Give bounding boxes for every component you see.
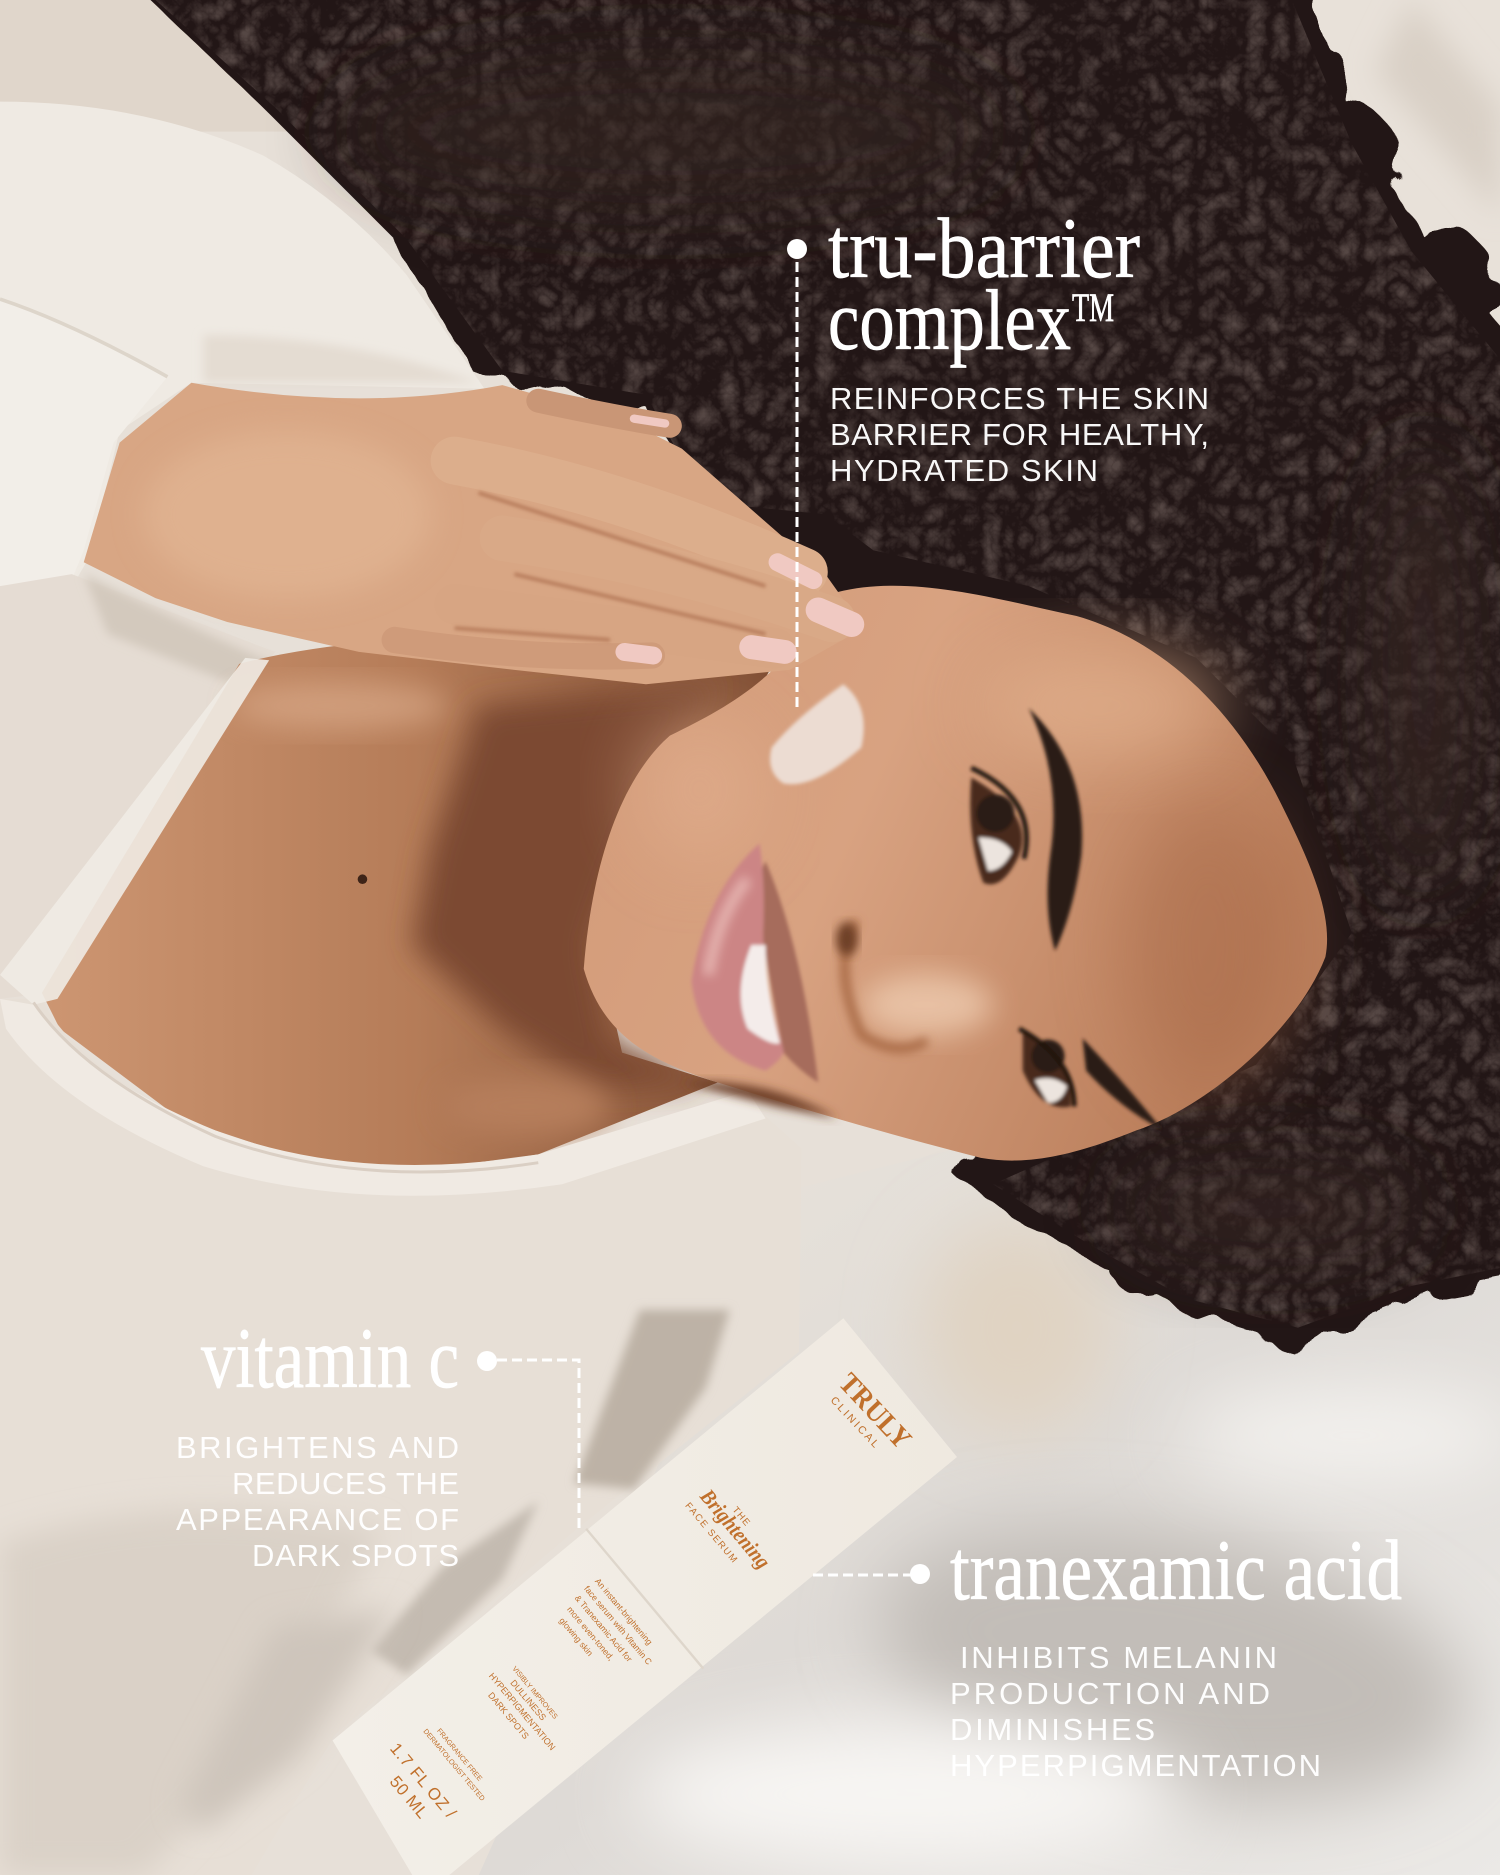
heading: TM bbox=[1072, 285, 1114, 330]
eye upper bbox=[970, 768, 1026, 884]
box label: brand: CLINICAL bbox=[828, 1395, 883, 1452]
pointer dot and dashed line bbox=[477, 1351, 579, 1530]
box label: claims: DULLINESS bbox=[508, 1678, 548, 1722]
description: BRIGHTENS AND bbox=[176, 1430, 459, 1465]
heading: tranexamic acid bbox=[950, 1522, 1402, 1618]
box label: description: glowing skin bbox=[557, 1616, 595, 1658]
nails bbox=[624, 419, 852, 656]
nose bbox=[836, 921, 927, 1048]
callout: vitamin c bbox=[176, 1310, 579, 1573]
neck and chest skin bbox=[42, 631, 789, 1178]
box label: claims: VISIBLY IMPROVES bbox=[510, 1665, 559, 1721]
description: DIMINISHES bbox=[950, 1712, 1155, 1747]
description: INHIBITS MELANIN bbox=[960, 1640, 1277, 1675]
description: REDUCES THE bbox=[232, 1466, 459, 1501]
box label: size: DERMATOLOGIST TESTED bbox=[421, 1728, 486, 1803]
box label: size: FRAGRANCE FREE bbox=[435, 1727, 484, 1783]
box label: product name: FACE SERUM bbox=[682, 1501, 740, 1566]
box label: claims bbox=[477, 1658, 573, 1761]
heading: complex bbox=[828, 272, 1071, 368]
box label: claims: HYPERPIGMENTATION bbox=[487, 1671, 557, 1752]
heading: tru-barrier bbox=[828, 200, 1140, 296]
face bbox=[584, 586, 1327, 1161]
box label: description: An instant-brightening bbox=[593, 1576, 655, 1647]
description: BARRIER FOR HEALTHY, bbox=[830, 417, 1209, 452]
callout: tru-barrier complex bbox=[787, 200, 1209, 712]
lower shirt bbox=[0, 658, 801, 1875]
eye lower bbox=[1019, 1029, 1074, 1107]
upper chest shirt bbox=[0, 574, 287, 999]
description bbox=[950, 1640, 1321, 1783]
callout: tranexamic acid bbox=[813, 1522, 1402, 1783]
description: PRODUCTION AND bbox=[950, 1676, 1270, 1711]
heading bbox=[828, 200, 1140, 368]
description: HYDRATED SKIN bbox=[830, 453, 1098, 488]
sleeve raised arm bbox=[0, 102, 484, 604]
product box bbox=[333, 1318, 957, 1875]
box label: description bbox=[552, 1575, 664, 1692]
box label: claims: DARK SPOTS bbox=[486, 1690, 531, 1741]
serum dollop bbox=[770, 684, 864, 784]
description: REINFORCES THE SKIN bbox=[830, 381, 1209, 416]
pointer dot and dashed line bbox=[787, 239, 807, 712]
description bbox=[176, 1430, 459, 1573]
box label: product name: Brightening bbox=[695, 1484, 775, 1573]
box label: description: & Tranexamic Acid for bbox=[573, 1593, 634, 1664]
description bbox=[830, 381, 1209, 488]
hand bbox=[84, 383, 864, 684]
box label: description: more even-toned, bbox=[565, 1604, 616, 1662]
eyebrow upper bbox=[1029, 708, 1082, 951]
box label: size: 1.7 FL OZ / bbox=[386, 1739, 461, 1823]
lips bbox=[691, 843, 818, 1083]
eyebrow lower bbox=[1083, 1038, 1163, 1130]
description: HYPERPIGMENTATION bbox=[950, 1748, 1321, 1783]
box label: description: face serum with Vitamin C bbox=[582, 1584, 654, 1667]
box label: product name: THE bbox=[730, 1505, 753, 1529]
box label: size: 50 ML bbox=[386, 1772, 433, 1823]
pointer dot and dashed line bbox=[813, 1564, 930, 1584]
description: DARK SPOTS bbox=[252, 1538, 459, 1573]
box label: size bbox=[370, 1714, 495, 1842]
description: APPEARANCE OF bbox=[176, 1502, 459, 1537]
heading: vitamin c bbox=[201, 1310, 459, 1406]
box label: brand: TRULY bbox=[832, 1367, 918, 1455]
hair bbox=[126, 0, 1500, 1349]
